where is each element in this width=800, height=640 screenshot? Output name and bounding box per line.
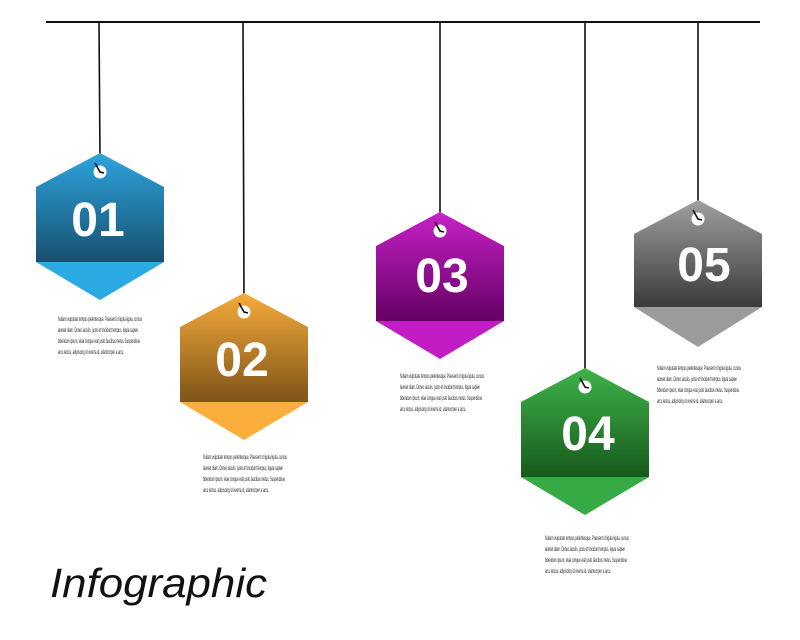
caption 03: arcu lectus, adipiscing id viverra id, ullamcorper a arcu. [400,407,466,413]
caption 05 [657,366,741,405]
caption 05: arcu lectus, adipiscing id viverra id, ullamcorper a arcu. [657,399,723,405]
text: laoreet diam. Donec iaculis, justo et tincidunt tempus, ligula sapien [400,385,480,391]
caption 02 [203,455,287,494]
caption 04: arcu lectus, adipiscing id viverra id, ullamcorper a arcu. [545,569,611,575]
tag 05: 05 [677,239,731,292]
text: Nullam vulputate tempus pellentesque. Praesent id ligula ligula, cursus [203,455,287,461]
text: bibendum ipsum, vitae congue erat justo faucibus metus. Suspendisse [400,396,482,402]
top hanging line [46,21,760,23]
tag 02 [180,293,308,440]
caption 02: arcu lectus, adipiscing id viverra id, ullamcorper a arcu. [203,488,269,494]
text: laoreet diam. Donec iaculis, justo et tincidunt tempus, ligula sapien [545,547,625,553]
caption 03 [400,374,484,413]
tag 05 [634,200,762,347]
tag 04: 04 [561,408,615,461]
tag 01 [36,153,164,300]
text: Nullam vulputate tempus pellentesque. Praesent id ligula ligula, cursus [545,536,629,542]
text: laoreet diam. Donec iaculis, justo et tincidunt tempus, ligula sapien [203,466,283,472]
tag 01: 01 [71,194,125,247]
tag 04 [521,368,649,515]
text: laoreet diam. Donec iaculis, justo et tincidunt tempus, ligula sapien [58,328,138,334]
caption 01: arcu lectus, adipiscing id viverra id, ullamcorper a arcu. [58,350,124,356]
text: Nullam vulputate tempus pellentesque. Praesent id ligula ligula, cursus [400,374,484,380]
text: Nullam vulputate tempus pellentesque. Praesent id ligula ligula, cursus [58,317,142,323]
caption 01 [58,317,142,356]
tag 02: 02 [215,334,269,387]
tag 03: 03 [415,250,469,303]
text: bibendum ipsum, vitae congue erat justo faucibus metus. Suspendisse [58,339,140,345]
tag 03 [376,212,504,359]
caption 04 [545,536,629,575]
text: bibendum ipsum, vitae congue erat justo faucibus metus. Suspendisse [545,558,627,564]
strings [95,22,702,387]
title: Infographic [50,560,268,606]
text: bibendum ipsum, vitae congue erat justo faucibus metus. Suspendisse [203,477,285,483]
